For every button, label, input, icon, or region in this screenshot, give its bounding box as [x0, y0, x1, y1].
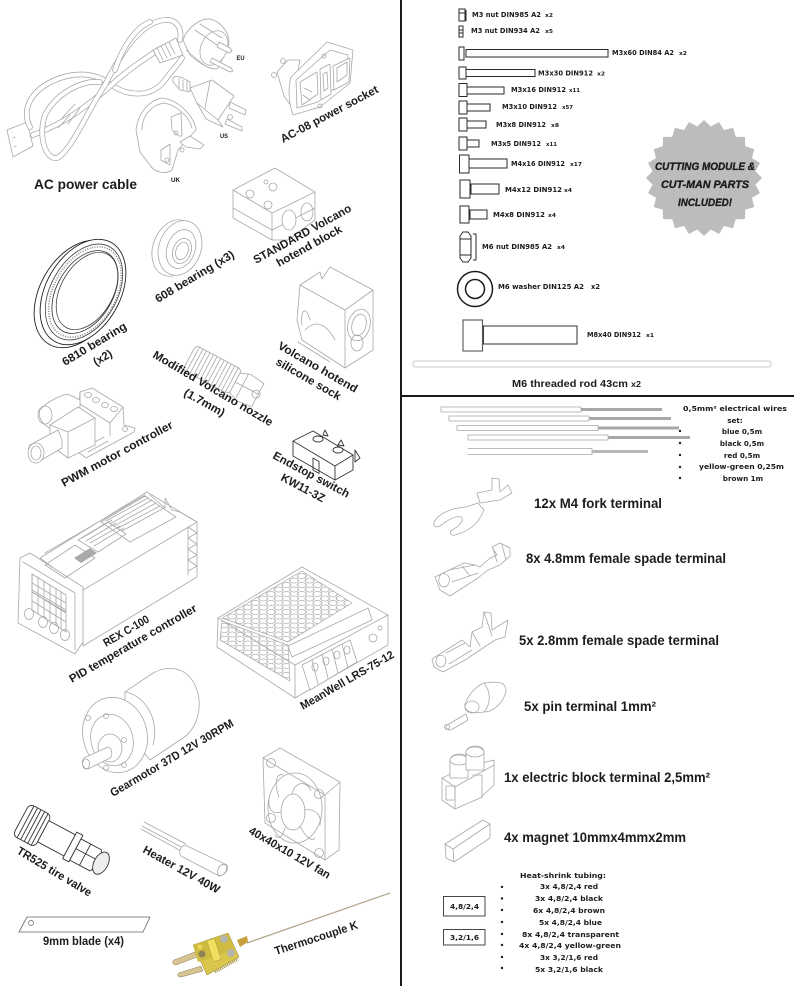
- size box 4,8/2,4: 4,8/2,4: [450, 902, 479, 911]
- wires list: black 0,5m: [720, 439, 764, 448]
- item: threaded rod: x2: [631, 380, 642, 389]
- item: M3x8: x8: [551, 123, 559, 129]
- label: PID temperature controller: PID temperature controller: [68, 602, 200, 686]
- item: threaded rod: [413, 361, 771, 390]
- icon: gearmotor: [74, 668, 199, 780]
- tubing list: 3x 4,8/2,4 black: [535, 894, 603, 903]
- label: Thermocouple K: Thermocouple K: [273, 919, 360, 958]
- label: 608 bearing: 608 bearing (x3): [153, 249, 237, 306]
- icon: power supply: [217, 567, 388, 698]
- item: M8x40: x1: [646, 333, 654, 339]
- icon: spade terminal small: [432, 612, 508, 672]
- part: AC power cable: [7, 19, 246, 192]
- wires list: yellow-green 0,25m: [699, 462, 784, 471]
- part: heater: [141, 822, 228, 896]
- wires list: brown 1m: [723, 474, 763, 483]
- item: M8x40: [463, 320, 654, 351]
- tubing list: 8x 4,8/2,4 transparent: [522, 930, 620, 939]
- label: AC-08 power socket: AC-08 power socket: [279, 84, 381, 146]
- part: PWM motor controller: [28, 388, 176, 490]
- part: Endstop switch: [271, 430, 360, 505]
- icon: fan: [263, 748, 340, 860]
- item: electrical wires set: [441, 404, 787, 483]
- item: M4x8: [460, 206, 556, 223]
- tubing list: Heat-shrink tubing:: [520, 871, 606, 880]
- label: 12x M4 fork terminal: [534, 496, 662, 511]
- tubing list: 3x 3,2/1,6 red: [540, 953, 598, 962]
- item: M3x30: M3x30 DIN912: [538, 70, 593, 78]
- part: Volcano hotend block: [233, 168, 354, 270]
- icon: large bearing: [16, 224, 144, 363]
- item: M4x8: x4: [548, 213, 556, 219]
- label: Volcano hotend: Volcano hotend: [276, 340, 359, 396]
- item: M3x30: [459, 67, 605, 79]
- item: fork terminal: [434, 478, 662, 535]
- badge: cutting module included: [646, 120, 762, 236]
- item: M3x5: [459, 137, 557, 150]
- label: fan: 40x40x10 12V fan: [246, 825, 332, 882]
- item: M3x5: x11: [546, 142, 557, 148]
- label: x2: (x2): [91, 348, 115, 369]
- label: AC power cable: AC power cable: [34, 176, 137, 192]
- item: M6 washer: x2: [591, 283, 600, 291]
- label: UK: UK: [171, 178, 181, 184]
- item: threaded rod: M6 threaded rod 43cm: [512, 379, 628, 390]
- icon: heater: [141, 822, 228, 877]
- badge: cutting module included: CUT-MAN PARTS: [661, 179, 750, 191]
- panel: electronics and hotend parts: [7, 19, 396, 977]
- item: M6 nut: x4: [557, 245, 565, 251]
- label: Modified Volcano nozzle: Modified Volcano nozzle: [150, 349, 275, 429]
- item: M3x16: [459, 84, 580, 96]
- part: MeanWell power supply: [217, 567, 396, 713]
- icon: block terminal: [442, 746, 494, 809]
- size box 3,2/1,6: 3,2/1,6: [450, 933, 479, 942]
- item: M3x60: [459, 47, 687, 60]
- item: M4x12: M4x12 DIN912: [505, 186, 562, 194]
- item: M3 nut DIN985: x2: [545, 13, 553, 19]
- panel: wiring and consumables: [432, 404, 787, 974]
- label: 1.7mm: (1.7mm): [182, 387, 227, 420]
- badge: cutting module included: INCLUDED!: [678, 197, 732, 209]
- tubing list: [501, 871, 621, 974]
- item: M3x8: [459, 118, 559, 131]
- icon: nozzle: [182, 345, 267, 409]
- item: 4.8mm spade terminal: [435, 543, 726, 596]
- icon: hotend block: [233, 168, 315, 240]
- item: M3x16: M3x16 DIN912: [511, 86, 566, 94]
- icon: small bearing: [144, 214, 209, 282]
- size box 4,8/2,4: [444, 896, 485, 916]
- icon: spade terminal: [435, 543, 510, 596]
- icon: tire valve: [13, 804, 116, 881]
- icon: power socket: [272, 42, 353, 115]
- item: M4x16: M4x16 DIN912: [511, 160, 565, 168]
- item: M3 nut DIN934: M3 nut DIN934 A2: [471, 27, 540, 35]
- item: M3 nut DIN934: x5: [545, 29, 553, 35]
- item: M3x16: x11: [569, 88, 580, 94]
- item: M3x10: [459, 101, 573, 114]
- part: 9mm blade: [19, 917, 150, 948]
- wires list: blue 0,5m: [722, 427, 762, 436]
- label: STANDARD Volcano: STANDARD Volcano: [252, 203, 354, 267]
- label: EU: EU: [236, 56, 244, 62]
- part: 12V fan: [246, 748, 340, 882]
- wires list: set:: [727, 416, 743, 425]
- divider: horizontal: [400, 395, 794, 397]
- item: M3x5: M3x5 DIN912: [491, 140, 541, 148]
- item: M4x12: [460, 180, 572, 198]
- icon: endstop switch: [293, 430, 360, 480]
- item: M4x16: [460, 155, 582, 173]
- icon: fork terminal: [434, 478, 512, 535]
- part: Volcano nozzle: [150, 345, 275, 429]
- wires list: 0,5mm² electrical wires: [683, 404, 787, 413]
- item: M3 nut DIN934: [459, 26, 553, 37]
- part: tire valve: [13, 804, 116, 899]
- tubing list: 4x 4,8/2,4 yellow-green: [519, 941, 621, 950]
- part: Gearmotor: [74, 668, 236, 800]
- part: PID temperature controller: [18, 492, 200, 686]
- item: M6 nut: [460, 232, 565, 262]
- icon: silicone sock: [297, 267, 374, 368]
- tubing list: 5x 4,8/2,4 blue: [539, 918, 602, 927]
- item: M6 washer: M6 washer DIN125 A2: [498, 283, 584, 291]
- label: Heater 12V 40W: Heater 12V 40W: [141, 844, 222, 896]
- size box 3,2/1,6: [444, 930, 485, 945]
- label: 4x magnet 10mmx4mmx2mm: [504, 830, 686, 845]
- item: block terminal: [442, 746, 710, 809]
- item: 2.8mm spade terminal: [432, 612, 719, 672]
- icon: magnet: [445, 820, 490, 862]
- label: 6810 bearing: 6810 bearing: [60, 321, 129, 369]
- item: M3x30: x2: [597, 72, 605, 78]
- item: M3 nut DIN985: [459, 9, 553, 21]
- label: KW11-3Z: KW11-3Z: [279, 472, 327, 505]
- label: 8x 4.8mm female spade terminal: [526, 551, 726, 566]
- item: pin terminal: [444, 682, 656, 730]
- label: 5x 2.8mm female spade terminal: [519, 633, 719, 648]
- label: US: US: [220, 134, 228, 140]
- icon: PWM controller: [28, 388, 135, 463]
- icon: wires: [441, 407, 690, 454]
- item: M3x8: M3x8 DIN912: [496, 121, 546, 129]
- item: M3x60: x2: [679, 51, 687, 57]
- icon: pin terminal: [444, 682, 506, 730]
- wires list: [679, 404, 787, 483]
- item: M8x40: M8x40 DIN912: [587, 331, 641, 339]
- tubing list: 6x 4,8/2,4 brown: [533, 906, 605, 915]
- part: 6810 bearing: [16, 224, 144, 369]
- item: M3x10: x57: [562, 105, 573, 111]
- label: MeanWell LRS-75-12: MeanWell LRS-75-12: [298, 649, 396, 713]
- item: magnet: [445, 820, 686, 862]
- item: heat-shrink tubing: [444, 871, 621, 974]
- label: REX C-100: REX C-100: [102, 614, 152, 650]
- label: 1x electric block terminal 2,5mm²: [504, 770, 710, 785]
- label: hotend block: hotend block: [275, 223, 345, 270]
- divider: vertical: [400, 0, 402, 986]
- icon: power cable with plugs: [7, 19, 246, 172]
- label: 5x pin terminal 1mm²: [524, 699, 656, 714]
- label: Gearmotor 37D 12V 30RPM: Gearmotor 37D 12V 30RPM: [108, 718, 236, 800]
- badge: cutting module included: CUTTING MODULE &: [655, 161, 755, 173]
- part: silicone sock: [274, 267, 374, 403]
- wires list: red 0,5m: [724, 451, 760, 460]
- icon: blade: [19, 917, 150, 932]
- label: TR525 tire valve: TR525 tire valve: [14, 845, 93, 899]
- item: M4x16: x17: [570, 162, 582, 168]
- item: M4x12: x4: [564, 188, 572, 194]
- part: AC-08 power socket: [272, 42, 381, 146]
- label: Endstop switch: Endstop switch: [271, 450, 351, 501]
- label: silicone sock: silicone sock: [274, 356, 343, 403]
- label: PWM motor controller: PWM motor controller: [60, 419, 176, 490]
- item: M3x10: M3x10 DIN912: [502, 103, 557, 111]
- icon: REX C-100 controller: [18, 492, 197, 654]
- tubing list: 5x 3,2/1,6 black: [535, 965, 603, 974]
- icon: thermocouple: [173, 893, 390, 977]
- part: Thermocouple K: [173, 893, 390, 977]
- label: 9mm blade: 9mm blade (x4): [43, 936, 124, 948]
- panel: hardware: [413, 9, 771, 390]
- item: M3x60: M3x60 DIN84 A2: [612, 49, 674, 57]
- item: M4x8: M4x8 DIN912: [493, 211, 545, 219]
- part: 608 bearing: [144, 214, 237, 306]
- item: M3 nut DIN985: M3 nut DIN985 A2: [472, 11, 541, 19]
- item: M6 washer: [458, 272, 600, 306]
- tubing list: 3x 4,8/2,4 red: [540, 882, 598, 891]
- item: M6 nut: M6 nut DIN985 A2: [482, 243, 552, 251]
